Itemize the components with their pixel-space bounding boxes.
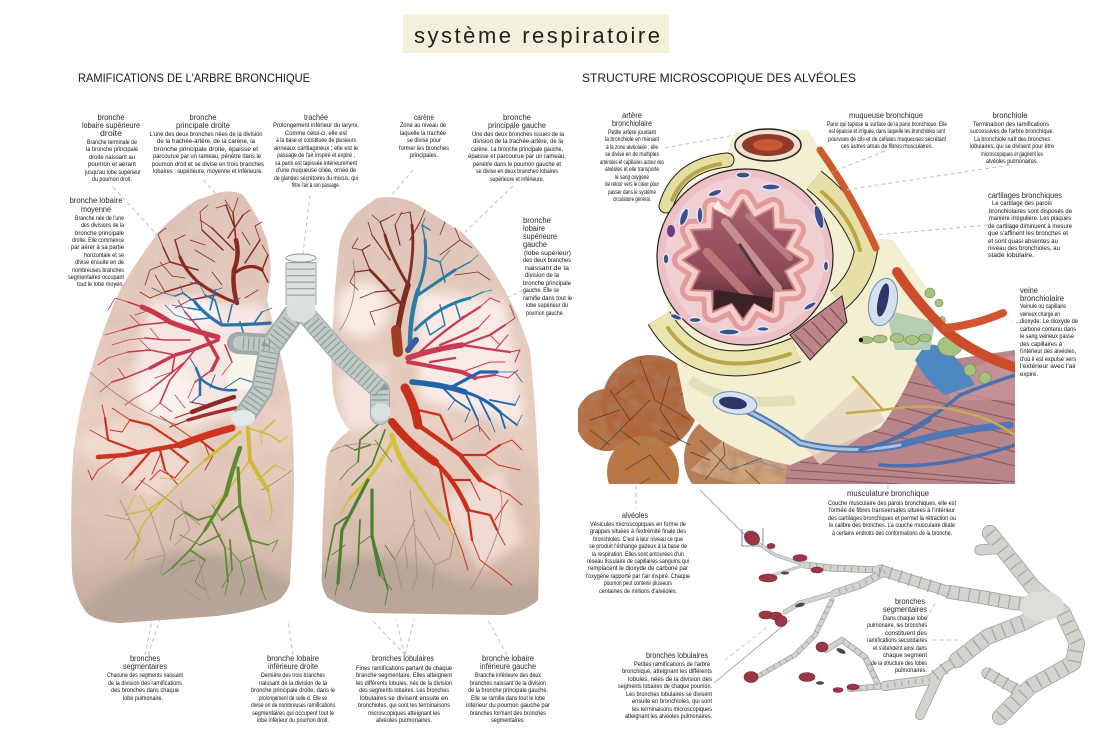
text: trachée: anneaux cartilagineux ; elle est le bbox=[274, 145, 358, 152]
text: bronche lobaire inférieure gauche: segmentaires. bbox=[491, 717, 525, 724]
text: trachée: passage de l'air inspiré et expiré ; bbox=[277, 152, 355, 159]
text: alvéoles: Vésicules microscopiques en forme de bbox=[590, 521, 686, 528]
text: bronches segmentaires (droite): chaque segment bbox=[883, 652, 927, 659]
text: trachée: filtre l'air à son passage. bbox=[292, 182, 340, 189]
text: musculature bronchique: des cartilages bronchiques et permet la rétraction ou bbox=[828, 515, 956, 522]
text: bronches lobulaires (droite): bronches lobulaires bbox=[646, 651, 708, 660]
text: bronche lobaire supérieure gauche: poumon gauche. bbox=[526, 310, 564, 317]
text: bronche lobaire moyenne bbox=[68, 196, 125, 288]
text: bronches lobulaires (droite): Petites ramifications de l'arbre bbox=[634, 661, 710, 668]
text: artère bronchiolaire: de retour vers le cœur pour bbox=[605, 181, 660, 188]
text: artère bronchiolaire: passer dans le système bbox=[608, 189, 656, 196]
text: cartilages bronchiques: stade lobulaire. bbox=[988, 252, 1034, 259]
text: bronche principale gauche: carène. La bronche principale gauche, bbox=[471, 146, 563, 153]
illustration: bronchial tree bbox=[742, 528, 1077, 717]
title: système respiratoire bbox=[414, 23, 660, 48]
text: bronche principale gauche: épaisse et parcourue par un rameau, bbox=[468, 153, 566, 160]
text: cartilages bronchiques: niveau des bronchioles, au bbox=[988, 245, 1060, 252]
text: bronchiole: La bronchiole naît des bronches bbox=[974, 136, 1051, 143]
blue vein bbox=[712, 375, 1015, 466]
text: bronche lobaire supérieure droite bbox=[82, 113, 142, 183]
text: veine bronchiolaire: l'intérieur des alvéoles, bbox=[1020, 348, 1076, 355]
text: alvéoles: remplacent le dioxyde de carbone par bbox=[588, 565, 689, 572]
text: bronches segmentaires (droite): et s'étendent ainsi dans bbox=[873, 645, 928, 652]
text: bronches lobulaires (droite): lobules, nées de la division des bbox=[628, 676, 713, 683]
text: bronche principale droite: parcourue par un rameau, pénètre dans le bbox=[153, 153, 261, 160]
text: carène: Zone au niveau de bbox=[400, 122, 446, 129]
text: bronche lobaire supérieure gauche: naissant de la bbox=[525, 265, 569, 272]
text: carène: laquelle la trachée bbox=[400, 130, 446, 137]
text: bronche lobaire inférieure gauche: inférieur du poumon gauche par bbox=[466, 702, 551, 709]
text: bronche lobaire supérieure droite: bronche bbox=[98, 113, 124, 122]
text: artère bronchiolaire: la bronchiole en menant bbox=[605, 136, 659, 143]
text: bronche principale gauche: Une des deux bronches issues de la bbox=[472, 131, 564, 138]
vessels: green lower lobe bbox=[325, 423, 395, 605]
text: bronches lobulaires (droite) bbox=[618, 651, 713, 720]
text: bronches segmentaires (droite): constituent des bbox=[885, 630, 928, 637]
text: bronche principale gauche bbox=[468, 113, 566, 183]
text: bronche lobaire moyenne: tout le lobe moyen. bbox=[77, 281, 124, 288]
text: bronche lobaire supérieure droite: du poumon droit. bbox=[92, 176, 132, 183]
text: bronches segmentaires (gauche): segmentaires bbox=[123, 662, 167, 671]
text: bronches lobulaires (droite): les terminaisons microscopiques bbox=[632, 706, 713, 713]
text: veine bronchiolaire: expiré. bbox=[1020, 371, 1038, 378]
text: bronche lobaire moyenne: divise ensuite en de bbox=[75, 259, 124, 266]
text: bronche lobaire supérieure gauche: lobe supérieur du bbox=[526, 302, 568, 309]
text: bronche principale droite: L'une des deux bronches nées de la division bbox=[150, 131, 263, 138]
text: cartilages bronchiques: cartilages bronchiques bbox=[988, 191, 1062, 200]
text: trachée: de glandes sécrétoires du mucus, qui bbox=[274, 175, 358, 182]
text: bronches segmentaires (droite) bbox=[867, 597, 928, 674]
text: bronche lobaire inférieure droite: Dernière des trois branches bbox=[261, 672, 326, 679]
text: bronche principale droite bbox=[150, 113, 265, 175]
text: bronche principale gauche: division de la trachée-artère, de la bbox=[473, 138, 563, 145]
text: alvéoles: grappes situées à l'extrémité finale des bbox=[590, 528, 687, 535]
text: muqueuse bronchique: est épaisse et irriguée, dans laquelle les bronchioles sont bbox=[829, 128, 945, 135]
text: bronche lobaire supérieure gauche: gauche bbox=[523, 240, 547, 249]
text: cartilages bronchiques: Le cartilage des parois bbox=[992, 200, 1053, 207]
text: bronchiole: bronchiole bbox=[992, 111, 1028, 120]
text: bronches segmentaires (gauche) bbox=[107, 654, 183, 702]
text: musculature bronchique: à certains endroits des conformations de la bronche. bbox=[832, 530, 952, 537]
text: veine bronchiolaire: veineux chargé en bbox=[1020, 311, 1060, 318]
text: bronches lobulaires (gauche): les différents lobules, nés de la division bbox=[356, 680, 452, 687]
text: bronches lobulaires (gauche): Fines ramifications partant de chaque bbox=[356, 665, 452, 672]
text: musculature bronchique: musculature bronchique bbox=[847, 489, 929, 498]
text: bronche lobaire inférieure droite: bronche principale droite, dans le bbox=[251, 687, 335, 694]
vessels: pale grey lower lobe bbox=[105, 500, 210, 600]
text: artère bronchiolaire: le sang oxygéné bbox=[615, 174, 649, 181]
text: bronches lobulaires (droite): atteignant les alvéoles pulmonaires. bbox=[625, 713, 712, 720]
vessels: teal upper lobe bbox=[410, 218, 492, 345]
muscle wedge bbox=[790, 296, 847, 360]
text: bronche principale droite: principale droite bbox=[176, 121, 230, 130]
text: bronche principale droite: poumon droit et se divise en trois branches bbox=[152, 161, 265, 168]
text: bronche lobaire moyenne: moyenne bbox=[81, 205, 111, 214]
text: bronchiole: Terminaison des ramifications bbox=[973, 121, 1050, 128]
text: bronche lobaire supérieure gauche bbox=[523, 216, 572, 317]
text: bronches lobulaires (droite): Les bronches lobulaires se divisent bbox=[626, 691, 712, 698]
text: veine bronchiolaire: veine bbox=[1020, 286, 1038, 295]
text: bronches segmentaires (droite): segmentaires bbox=[883, 605, 927, 614]
text: bronches lobulaires (droite): segments lobaires de chaque poumon. bbox=[618, 683, 712, 690]
text: bronche lobaire supérieure droite: poumon et aérant bbox=[88, 161, 136, 168]
leader lines: alveoli pointer bbox=[700, 490, 790, 683]
text: bronchiole bbox=[970, 111, 1054, 165]
blue and green vessels, glands bbox=[859, 276, 991, 395]
yellow cartilage rings bbox=[659, 160, 866, 364]
text: artère bronchiolaire: bronchiolaire bbox=[612, 119, 652, 128]
vessels: grey lower lobe bbox=[395, 490, 455, 590]
text: bronches lobulaires (gauche): alvéoles pulmonaires. bbox=[376, 717, 432, 724]
text: carène: principales. bbox=[410, 152, 438, 159]
illustration: alveoli structure cross-section bbox=[576, 129, 1017, 508]
text: artère bronchiolaire: artérioles et capillaires autour des bbox=[600, 159, 664, 166]
text: bronche principale gauche: pénètre dans le poumon gauche et bbox=[473, 161, 561, 168]
vessels: blue and maroon hilum bbox=[170, 358, 252, 427]
text: bronches lobulaires (gauche): lobulaires se divisent ensuite en bbox=[360, 695, 448, 702]
text: bronche principale droite: bronche bbox=[190, 113, 216, 122]
text: bronche lobaire inférieure gauche: inférieure gauche bbox=[480, 662, 536, 671]
text: cartilages bronchiques: et sont quasi absentes au bbox=[988, 238, 1058, 245]
text: veine bronchiolaire: dioxyde. Le dioxyde de bbox=[1020, 318, 1078, 325]
text: muqueuse bronchique: ces autres amas de fibres musculaires. bbox=[841, 143, 933, 150]
alveolar clusters bbox=[742, 528, 859, 692]
text: trachée: Prolongement inférieur du larynx. bbox=[273, 122, 359, 129]
text: bronches segmentaires (gauche): de la division des ramifications bbox=[108, 680, 183, 687]
text: bronches segmentaires (droite): pulmonaire, les bronches bbox=[867, 622, 928, 629]
title bbox=[403, 14, 669, 53]
text: alvéoles: la respiration. Elles sont entourées d'un bbox=[592, 551, 684, 558]
heading: ramifications: RAMIFICATIONS DE L'ARBRE BRONCHIQUE bbox=[78, 73, 310, 85]
text: carène: former les bronches bbox=[399, 145, 450, 152]
text: bronche lobaire supérieure droite: droite naissant au bbox=[89, 154, 135, 161]
text: bronches segmentaires (droite): pulmonaires. bbox=[895, 667, 927, 674]
text: cartilages bronchiques: manière irrégulière. Les plaques bbox=[989, 215, 1072, 222]
text: bronche lobaire inférieure droite: lobe inférieur du poumon droit. bbox=[257, 717, 329, 724]
vessels: green lower lobe bbox=[162, 448, 278, 600]
text: musculature bronchique bbox=[828, 489, 956, 537]
text: bronche lobaire supérieure droite: lobaire supérieure bbox=[82, 121, 140, 130]
text: bronche lobaire supérieure droite: Branche terminale de bbox=[87, 139, 137, 146]
text: muqueuse bronchique: muqueuse bronchique bbox=[849, 111, 923, 120]
text: veine bronchiolaire: le sang veineux passe bbox=[1020, 333, 1074, 340]
text: bronche lobaire inférieure gauche bbox=[466, 654, 551, 724]
text: veine bronchiolaire: l'extérieur avec l'air bbox=[1020, 363, 1077, 370]
text: bronche principale gauche: se divise en deux branches lobaires bbox=[476, 168, 559, 175]
text: bronches lobulaires (droite): ensuite en bronchioles, qui sont bbox=[632, 698, 712, 705]
text: carène: carène bbox=[414, 113, 434, 122]
text: bronche lobaire moyenne: horizontale et se bbox=[84, 252, 124, 259]
text: bronche lobaire supérieure gauche: bronche bbox=[523, 216, 551, 225]
illustration: right lung bbox=[318, 197, 545, 620]
text: bronche lobaire supérieure droite: jusqu'au lobe supérieur bbox=[84, 169, 142, 176]
text: bronche principale gauche: supérieure et inférieure. bbox=[490, 176, 544, 183]
text: artère bronchiolaire bbox=[600, 111, 664, 203]
text: muqueuse bronchique: pourvues de cils et de cellules muqueuses sécrétant bbox=[828, 136, 946, 143]
text: alvéoles: réseau tissulaire de capillaires sanguins qui bbox=[587, 558, 689, 565]
text: bronches lobulaires (gauche): des segments lobaires. Les bronches bbox=[359, 687, 450, 694]
text: bronches segmentaires (gauche): bronches bbox=[130, 654, 160, 663]
text: bronches segmentaires (droite): ramifications secondaires bbox=[867, 637, 928, 644]
text: musculature bronchique: le calibre des bronches. La couche musculaire dilate bbox=[829, 522, 955, 529]
text: bronches segmentaires (gauche): lobe pulmonaire. bbox=[123, 695, 163, 702]
text: veine bronchiolaire: carbone contenu dans bbox=[1020, 326, 1077, 333]
text: alvéoles: poumon peut contenir plusieurs bbox=[604, 580, 673, 587]
text: bronches segmentaires (droite): Dans chaque lobe bbox=[883, 615, 927, 622]
small bronchiole oval bbox=[735, 129, 801, 161]
text: veine bronchiolaire: d'où il est expulsé vers bbox=[1020, 356, 1077, 363]
text: bronche lobaire moyenne: nombreuses branches bbox=[72, 267, 125, 274]
text: bronche principale droite: de la trachée-artère, de la carène, la bbox=[157, 138, 255, 145]
text: veine bronchiolaire: bronchiolaire bbox=[1020, 294, 1064, 303]
text: bronchiole: lobulaires, qui se divisent pour être bbox=[970, 143, 1054, 150]
text: bronche lobaire inférieure gauche: bronche lobaire bbox=[482, 654, 534, 663]
text: trachée bbox=[273, 113, 359, 189]
wavy mucosal folds bbox=[683, 200, 803, 320]
text: bronche lobaire moyenne: bronche principale bbox=[75, 230, 124, 237]
text: bronches segmentaires (droite): bronches bbox=[895, 597, 925, 606]
text: trachée: à la base et constituée de plusieurs bbox=[276, 137, 357, 144]
text: bronches segmentaires (gauche): des bronches dans chaque bbox=[111, 687, 179, 694]
text: bronche lobaire inférieure gauche: Branche inférieure des deux bbox=[475, 672, 542, 679]
text: bronche lobaire inférieure droite: divise en de nombreuses ramifications bbox=[251, 702, 336, 709]
text: bronche lobaire supérieure gauche: bronche principale bbox=[523, 280, 571, 287]
text: bronche lobaire supérieure gauche: lobaire bbox=[523, 224, 545, 233]
text: cartilages bronchiques: que s'affinent les bronches et bbox=[988, 230, 1068, 237]
text: bronche lobaire moyenne: par aérer à sa partie bbox=[71, 244, 124, 251]
text: bronche lobaire inférieure gauche: branches formant des bronches bbox=[470, 710, 547, 717]
text: artère bronchiolaire: alvéoles et elle transporte bbox=[605, 166, 659, 173]
vessels: blue lower lingula bbox=[412, 372, 522, 432]
leader lines: microscopy bbox=[636, 135, 1020, 640]
text: bronche lobaire supérieure gauche: division de la bbox=[525, 272, 559, 279]
text: trachée: Comme celui-ci, elle est bbox=[285, 130, 347, 137]
text: bronche lobaire supérieure gauche: gauche. Elle se bbox=[523, 287, 559, 294]
text: bronche lobaire inférieure gauche: Elle se ramifie dans tout le lobe bbox=[471, 695, 545, 702]
text: alvéoles: l'oxygène rapporté par l'air inspiré. Chaque bbox=[586, 573, 690, 580]
text: bronche lobaire supérieure gauche: ramifie dans tout le bbox=[523, 295, 572, 302]
mucosa wall and lumen bbox=[657, 169, 833, 345]
vessels: pink upper lingula bbox=[408, 298, 520, 378]
text: bronche lobaire inférieure droite: inférieure droite bbox=[268, 662, 318, 671]
illustration: left lung bbox=[71, 191, 295, 625]
text: veine bronchiolaire: Veinule ou capillaire bbox=[1020, 303, 1066, 310]
text: veine bronchiolaire bbox=[1020, 286, 1078, 378]
text: bronche lobaire supérieure gauche: des deux branches bbox=[523, 257, 572, 264]
tubes fill bbox=[750, 533, 1077, 717]
text: carène bbox=[399, 113, 450, 159]
text: veine bronchiolaire: des capillaires à bbox=[1020, 341, 1062, 348]
text: bronche lobaire supérieure droite: la bronche principale bbox=[86, 146, 138, 153]
text: bronche lobaire inférieure droite bbox=[251, 654, 336, 724]
alveoli clusters bbox=[578, 355, 788, 484]
text: bronche lobaire supérieure gauche: (lobe supérieur) bbox=[524, 250, 571, 257]
text: bronche principale droite: bronche principale droite, épaisse et bbox=[154, 146, 258, 153]
text: musculature bronchique: formée de fibres transversales situées à l'intérieur bbox=[829, 507, 956, 514]
text: bronche principale droite: lobaires : supérieure, moyenne et inférieure. bbox=[153, 168, 263, 175]
text: trachée: trachée bbox=[304, 113, 328, 122]
text: bronches lobulaires (gauche): bronchioles, qui sont les terminaisons bbox=[358, 702, 451, 709]
text: cartilages bronchiques bbox=[988, 191, 1072, 259]
vessels: blue upper lobe bbox=[152, 282, 272, 342]
text: bronchiole: microscopiques et gagnent les bbox=[981, 151, 1044, 158]
text: bronches lobulaires (gauche): microscopiques atteignant les bbox=[368, 710, 441, 717]
text: bronche lobaire inférieure droite: naissant de la division de la bbox=[259, 680, 327, 687]
text: muqueuse bronchique bbox=[827, 111, 947, 150]
text: alvéoles: centaines de millions d'alvéoles. bbox=[599, 588, 677, 595]
text: artère bronchiolaire: à la zone alvéolaire ; elle bbox=[606, 144, 658, 151]
text: bronche lobaire inférieure droite: prolongement de celle-ci. Elle se bbox=[259, 695, 327, 702]
text: bronches lobulaires (gauche): branche segmentaire. Elles atteignent bbox=[356, 672, 452, 679]
text: alvéoles: se produit l'échange gazeux à la base de bbox=[589, 543, 687, 550]
text: cartilages bronchiques: bronchiolaires sont disposés de bbox=[989, 208, 1072, 215]
text: bronche lobaire moyenne: des divisions de la bbox=[81, 222, 124, 229]
text: bronche lobaire moyenne: Branche née de l'une bbox=[75, 215, 124, 222]
text: bronchiole: successives de l'arbre bronchique. bbox=[970, 128, 1054, 135]
text: bronche lobaire inférieure droite: bronche lobaire bbox=[267, 654, 319, 663]
vessels: yellow lower lobe bbox=[340, 435, 452, 535]
leader lines: lungs bbox=[113, 170, 523, 655]
illustration: trachea and main bronchi bbox=[231, 254, 391, 426]
text: bronche lobaire supérieure gauche: supérieure bbox=[523, 232, 557, 241]
text: bronche lobaire inférieure droite: segmentaires qui occupent tout le bbox=[252, 710, 334, 717]
tubes rings bbox=[755, 533, 1077, 717]
vessels: maroon knot bbox=[396, 330, 416, 352]
text: bronche principale gauche: principale gauche bbox=[488, 121, 546, 130]
text: trachée: sa paroi est tapissée intérieurement bbox=[275, 160, 357, 167]
vessels: yellow lower lobe bbox=[125, 420, 288, 570]
text: bronche lobaire inférieure gauche: de la bronche principale gauche. bbox=[468, 687, 548, 694]
text: artère bronchiolaire: se divise en de multiples bbox=[605, 151, 660, 158]
text: cartilages bronchiques: de cartilage diminuent à mesure bbox=[988, 223, 1072, 230]
text: trachée: d'une muqueuse ciliée, ornée de bbox=[276, 167, 356, 174]
vessels: dark red upper lobe bbox=[350, 210, 425, 337]
text: bronchiole: alvéoles pulmonaires. bbox=[986, 158, 1038, 165]
text: bronche lobaire supérieure droite: droite bbox=[100, 129, 122, 138]
glands in wall bbox=[663, 172, 828, 335]
vessels: red lower lobe bbox=[392, 388, 522, 585]
text: artère bronchiolaire: Petite artère jouxtant bbox=[608, 129, 656, 136]
text: bronche lobaire moyenne: droite. Elle commence bbox=[72, 237, 124, 244]
vessels: pink middle lobe bbox=[98, 298, 232, 412]
text: artère bronchiolaire: artère bbox=[622, 111, 642, 120]
vessels: dark red upper lobe bbox=[140, 198, 268, 308]
text: musculature bronchique: Couche musculaire des parois bronchiques, elle est bbox=[828, 500, 956, 507]
text: bronche principale gauche: bronche bbox=[503, 113, 531, 122]
text: muqueuse bronchique: Paroi qui tapisse la surface de la paroi bronchique. Elle bbox=[827, 121, 947, 128]
text: bronches lobulaires (droite): bronchique, atteignant les différents bbox=[622, 668, 713, 675]
text: bronche lobaire moyenne: segmentaires occupant bbox=[68, 274, 124, 281]
yellow nerve bbox=[847, 377, 1017, 437]
red arteries bbox=[820, 150, 1017, 368]
text: bronches lobulaires (gauche): bronches lobulaires bbox=[372, 654, 434, 663]
muscle background bbox=[760, 350, 1015, 484]
vessels: brown extra twigs bbox=[440, 222, 490, 280]
text: bronches lobulaires (gauche) bbox=[356, 654, 452, 724]
heading: structure microscopique: STRUCTURE MICROSCOPIQUE DES ALVÉOLES bbox=[582, 72, 856, 85]
cream bronchus body bbox=[660, 130, 930, 465]
vessels: red lower lobe bbox=[88, 405, 232, 490]
text: alvéoles: bronchioles. C'est à leur niveau ce que bbox=[593, 536, 683, 543]
text: bronches segmentaires (droite): de la structure des lobes bbox=[871, 660, 928, 667]
text: carène: se divise pour bbox=[407, 137, 442, 144]
tubes outline bbox=[750, 533, 1077, 717]
text: bronches segmentaires (gauche): Chacune des segments naissant bbox=[107, 672, 183, 679]
text: artère bronchiolaire: circulatoire général. bbox=[613, 196, 651, 203]
text: alvéoles bbox=[586, 511, 690, 595]
text: alvéoles: alvéoles bbox=[622, 511, 648, 520]
text: bronche lobaire moyenne: bronche lobaire bbox=[70, 196, 122, 205]
text: bronche lobaire inférieure gauche: branches naissant de la division bbox=[470, 680, 546, 687]
